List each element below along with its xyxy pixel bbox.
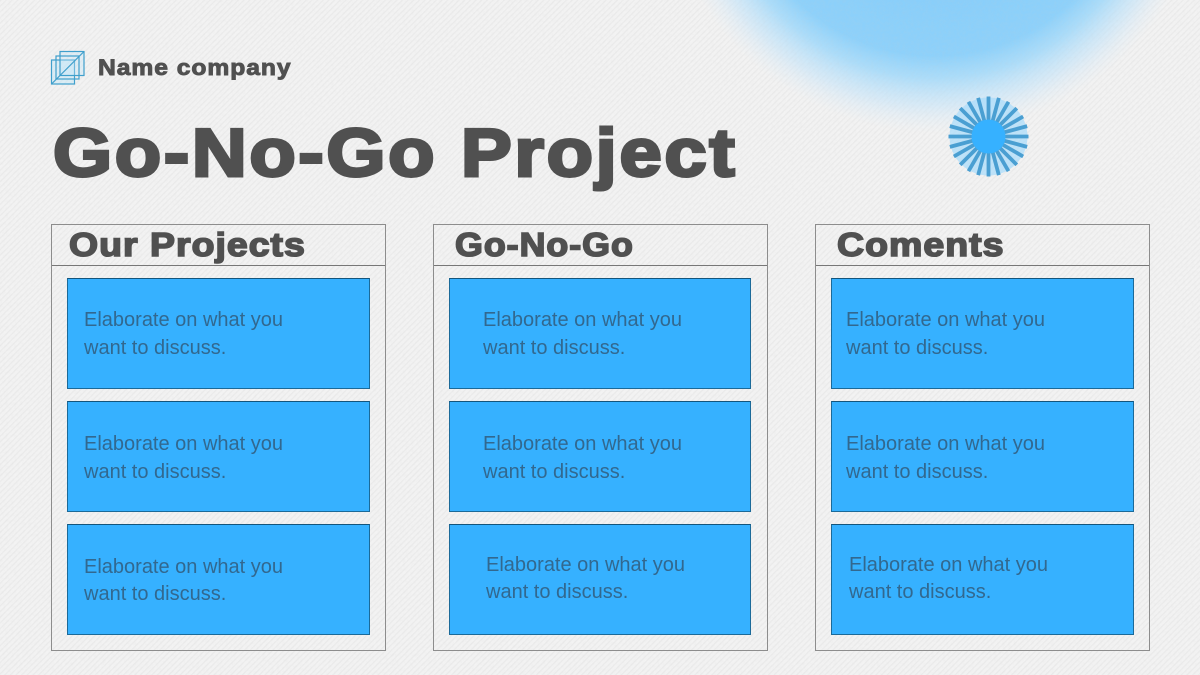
card 2: want to discuss. <box>84 461 226 483</box>
title: Go-No-Go Project <box>53 115 737 191</box>
heading: Go-No-Go: Go-No-Go <box>454 226 633 263</box>
card 3: want to discuss. <box>84 582 226 604</box>
card 1: Elaborate on what you <box>483 309 682 331</box>
panel: Go-No-Go <box>432 224 768 651</box>
card 2: want to discuss. <box>846 461 988 483</box>
card 1: want to discuss. <box>84 337 226 359</box>
card 1: want to discuss. <box>483 337 625 359</box>
card 2 <box>449 401 751 512</box>
card 2 <box>67 401 370 512</box>
card 3 <box>67 524 370 635</box>
card 3: Elaborate on what you <box>84 556 283 578</box>
card 3: Elaborate on what you <box>849 554 1048 576</box>
card 1: Elaborate on what you <box>846 309 1045 331</box>
card 3: want to discuss. <box>849 580 991 602</box>
icon: sunburst <box>948 96 1028 176</box>
logo icon: overlapping cubes <box>50 50 85 85</box>
card 2: Elaborate on what you <box>84 433 283 455</box>
company name: Name company <box>98 55 292 80</box>
card 2: Elaborate on what you <box>483 433 682 455</box>
card 1 <box>449 278 751 389</box>
card 3: Elaborate on what you <box>486 554 685 576</box>
card 1: Elaborate on what you <box>84 309 283 331</box>
card 1 <box>831 278 1134 389</box>
heading: Our Projects: Our Projects <box>68 226 305 263</box>
card 1 <box>67 278 370 389</box>
card 2: Elaborate on what you <box>846 433 1045 455</box>
panel: Coments <box>814 224 1150 651</box>
heading: Coments: Coments <box>836 226 1004 263</box>
card 3 <box>449 524 751 635</box>
card 3 <box>831 524 1134 635</box>
card 2: want to discuss. <box>483 461 625 483</box>
card 3: want to discuss. <box>486 580 628 602</box>
card 1: want to discuss. <box>846 337 988 359</box>
decorative blue glow <box>660 0 1200 133</box>
panel: Our Projects <box>50 224 386 651</box>
card 2 <box>831 401 1134 512</box>
